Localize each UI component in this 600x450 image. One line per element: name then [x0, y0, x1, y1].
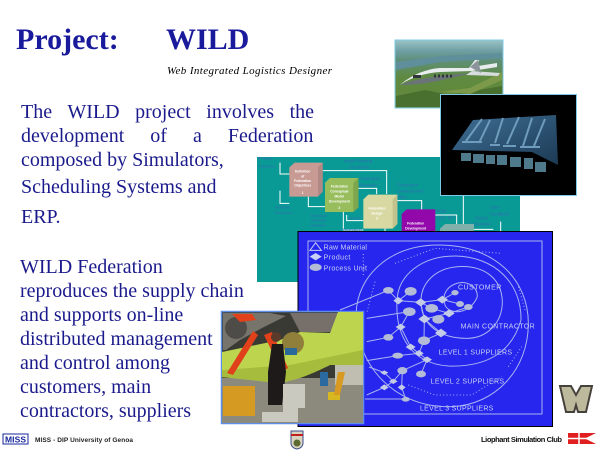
image: 3D WILD logo on black [440, 94, 576, 196]
text block: federation description [20, 256, 244, 422]
text block: federation description: and supports on-line [20, 304, 183, 326]
panel: federation process flowchart: Federation [397, 183, 419, 188]
photo: engineer beside aircraft [222, 312, 364, 424]
text block: federation description: customers, main [20, 376, 151, 398]
panel: federation process flowchart: Initial Planning [344, 159, 373, 164]
flow box 3: Federation [368, 207, 386, 211]
panel: federation process flowchart: FEDEP [348, 216, 361, 220]
footer: club text: Liophant Simulation Club [481, 435, 562, 444]
flow box 2: 2 [338, 206, 340, 210]
product nodes [380, 296, 455, 390]
flow box 1 [289, 163, 323, 197]
legend: Process Unit [324, 266, 367, 273]
flow box 2: Model [335, 195, 344, 199]
panel: federation process flowchart: Resources [275, 211, 293, 215]
title: WILD [166, 23, 249, 56]
text block: federation description: and control among [20, 352, 170, 374]
title: Project: [16, 23, 119, 56]
flow box 2: Development [329, 200, 351, 204]
text block: federation description: WILD Federation [20, 256, 163, 278]
panel: federation process flowchart: Program [258, 157, 272, 161]
flow box 5 [440, 224, 474, 233]
flow box 2: Conceptual [330, 190, 348, 194]
panel: federation process flowchart: Federation [359, 176, 381, 181]
panel: federation process flowchart: Federation [343, 227, 362, 232]
flow box 3 [363, 195, 397, 229]
text block: project description: ERP. [21, 206, 60, 228]
panel: federation process flowchart: Available [275, 206, 290, 210]
panel: federation process flowchart: Federation [470, 222, 491, 227]
text block: federation description: contractors, suppliers [20, 400, 191, 422]
panel: federation process flowchart: User [490, 205, 500, 210]
flow box 4 [402, 209, 435, 233]
flow box 3: Design [371, 211, 383, 215]
panel: federation process flowchart: Plan [397, 195, 407, 200]
panel: federation process flowchart: FED, RTI [437, 215, 455, 220]
flow box 1: 1 [302, 191, 304, 195]
text block: project description: The WILD project involves the [21, 101, 314, 123]
legend [310, 243, 367, 273]
panel: federation process flowchart: Document [349, 164, 370, 169]
legend: Product [324, 255, 350, 262]
level labels: MAIN CONTRACTOR [461, 324, 535, 331]
legend: Raw Material [324, 245, 367, 252]
flow box 4: Federation [407, 221, 424, 225]
text block: project description: Scheduling Systems and [21, 176, 217, 198]
panel: federation process flowchart: Objectives [311, 219, 327, 223]
panel: federation process flowchart: Development [397, 189, 424, 194]
title [16, 23, 249, 56]
panel: federation process flowchart: Statement [311, 223, 326, 227]
text block: project description [21, 101, 314, 228]
flow box 1: Definition [295, 170, 310, 174]
panel: federation process flowchart: Objectives [258, 165, 275, 169]
supply links [340, 290, 468, 399]
flow box 1: of [301, 174, 305, 178]
flow box 2 [325, 178, 358, 212]
panel: federation process flowchart: FOM [437, 209, 447, 214]
icon: W logo [560, 386, 592, 412]
panel: federation process flowchart: Feedback [490, 212, 510, 217]
text block: project description: composed by Simulators, [21, 149, 224, 171]
flow box 3: 3 [376, 216, 378, 220]
footer: university text: MISS - DIP University of Genoa [35, 437, 133, 444]
footer: MISS logo: MISS [5, 434, 26, 444]
text block: federation description: distributed management [20, 328, 213, 350]
level labels [420, 285, 535, 412]
flow box 1: Objectives [294, 184, 311, 188]
icon: university crest [291, 431, 303, 449]
flow box 2: Federation [331, 185, 348, 189]
flow box 1: Federation [294, 179, 311, 183]
panel: supply chain diagram [298, 232, 552, 426]
text block: project description: development of a Federation [21, 125, 313, 147]
photo: aircraft in flight [395, 40, 503, 108]
level labels: CUSTOMER [458, 285, 501, 292]
icon: club flag [568, 433, 596, 444]
process unit nodes [383, 287, 473, 402]
subtitle: Web Integrated Logistics Designer [167, 65, 333, 77]
spiral levels [356, 245, 528, 407]
flow box 4: Development [405, 227, 427, 231]
level labels: LEVEL 1 SUPPLIERS [439, 350, 512, 357]
level labels: LEVEL 2 SUPPLIERS [431, 379, 504, 386]
panel: federation process flowchart: Tested [475, 216, 488, 221]
panel: federation process flowchart: Scenario [359, 182, 377, 187]
panel: federation process flowchart [257, 157, 520, 282]
level labels: LEVEL 3 SUPPLIERS [420, 405, 494, 412]
panel: federation process flowchart: Federation [311, 214, 327, 218]
text block: federation description: reproduces the supply chain [20, 280, 244, 302]
